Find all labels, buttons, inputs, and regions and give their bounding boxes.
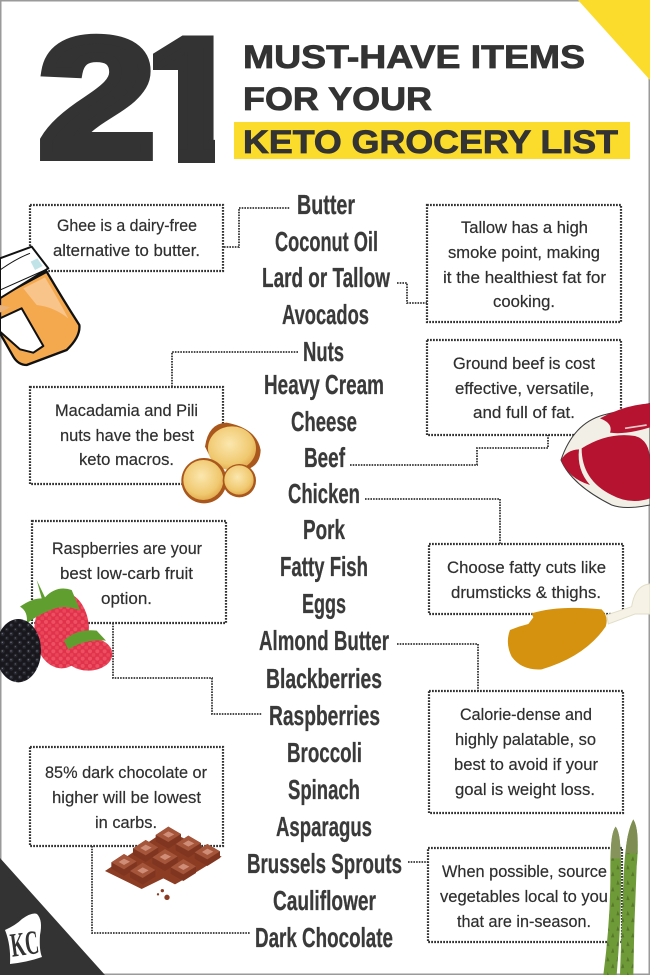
callout: tallow: Tallow has a high <box>461 218 588 237</box>
callout: macadamia <box>30 387 223 484</box>
grocery list: Brussels Sprouts <box>247 848 402 879</box>
callout: ground beef: Ground beef is cost <box>453 354 595 373</box>
icon: macadamia nuts <box>181 423 261 503</box>
grocery list: Avocados <box>282 299 369 330</box>
grocery list: Chicken <box>288 478 360 509</box>
callout: ghee: alternative to butter. <box>53 241 200 260</box>
grocery list: Beef <box>304 442 345 473</box>
callout: dark chocolate: higher will be lowest <box>52 788 201 807</box>
grocery list: Fatty Fish <box>280 551 368 582</box>
callout: tallow: cooking. <box>493 292 555 311</box>
callout: ground beef: effective, versatile, <box>455 379 594 398</box>
icon: chocolate bar <box>105 827 222 900</box>
callout: macadamia: Macadamia and Pili <box>55 401 198 420</box>
icon: asparagus <box>603 819 638 975</box>
grocery list: Butter <box>297 189 355 220</box>
callout: macadamia: keto macros. <box>79 450 174 469</box>
callout: chicken cuts <box>429 544 623 614</box>
grocery list: Eggs <box>302 588 346 619</box>
logo: KC: KC <box>8 924 41 965</box>
title <box>40 34 630 163</box>
icon: beef steak <box>561 403 650 507</box>
callout: raspberries <box>32 521 226 623</box>
callout: macadamia: nuts have the best <box>60 426 194 445</box>
grocery list: Broccoli <box>287 737 362 768</box>
icon: chicken drumstick <box>508 584 650 669</box>
grocery list: Cauliflower <box>273 885 376 916</box>
big number 21: 2 <box>39 4 155 192</box>
callout: raspberries: Raspberries are your <box>52 539 202 558</box>
callout: vegetables: When possible, source <box>442 862 607 881</box>
grocery list: Raspberries <box>269 700 380 731</box>
callout: almond butter: Calorie-dense and <box>460 705 592 724</box>
callout: tallow: smoke point, making <box>448 243 600 262</box>
callout: ghee: Ghee is a dairy-free <box>57 216 197 235</box>
grocery list: Lard or Tallow <box>262 262 390 293</box>
callout: dark chocolate <box>30 747 223 846</box>
grocery list: Asparagus <box>276 811 372 842</box>
callout: almond butter: highly palatable, so <box>455 730 596 749</box>
callout: raspberries: option. <box>101 589 152 608</box>
grocery list <box>247 189 402 953</box>
callout: tallow <box>427 205 621 322</box>
callout: vegetables <box>428 848 622 942</box>
callout: raspberries: best low-carb fruit <box>60 564 193 583</box>
grocery list: Almond Butter <box>259 625 389 656</box>
callout: ground beef <box>427 340 621 435</box>
heading line 2: FOR YOUR <box>243 81 432 117</box>
callout: tallow: it the healthiest fat for <box>443 268 606 287</box>
grocery list: Cheese <box>291 406 357 437</box>
big number 21: 1 <box>139 2 243 201</box>
connector lines <box>92 208 548 933</box>
callout: dark chocolate: 85% dark chocolate or <box>45 763 207 782</box>
callout: chicken cuts: drumsticks & thighs. <box>451 583 601 602</box>
callout: almond butter <box>429 691 623 813</box>
callout: chicken cuts: Choose fatty cuts like <box>447 558 606 577</box>
corner: dark triangle with logo <box>0 858 105 975</box>
grocery list: Nuts <box>303 336 344 367</box>
callout: ghee <box>30 205 223 271</box>
grocery list: Blackberries <box>266 663 382 694</box>
callout: vegetables: vegetables local to you <box>440 887 608 906</box>
heading line 1: MUST-HAVE ITEMS <box>243 39 585 75</box>
heading highlight: KETO GROCERY LIST <box>243 124 619 160</box>
big number 21 <box>40 34 215 163</box>
grocery list: Dark Chocolate <box>255 922 393 953</box>
corner: yellow triangle <box>578 0 650 80</box>
icon: ghee jar <box>0 247 79 365</box>
callout: ground beef: and full of fat. <box>473 403 575 422</box>
callout: vegetables: that are in-season. <box>457 912 591 931</box>
icon: raspberries and blackberry <box>0 580 112 682</box>
callout: almond butter: goal is weight loss. <box>455 780 595 799</box>
grocery list: Heavy Cream <box>264 369 384 400</box>
grocery list: Coconut Oil <box>275 226 378 257</box>
grocery list: Spinach <box>288 774 360 805</box>
grocery list: Pork <box>303 514 345 545</box>
callout: almond butter: best to avoid if your <box>454 755 598 774</box>
callout: dark chocolate: in carbs. <box>95 813 157 832</box>
